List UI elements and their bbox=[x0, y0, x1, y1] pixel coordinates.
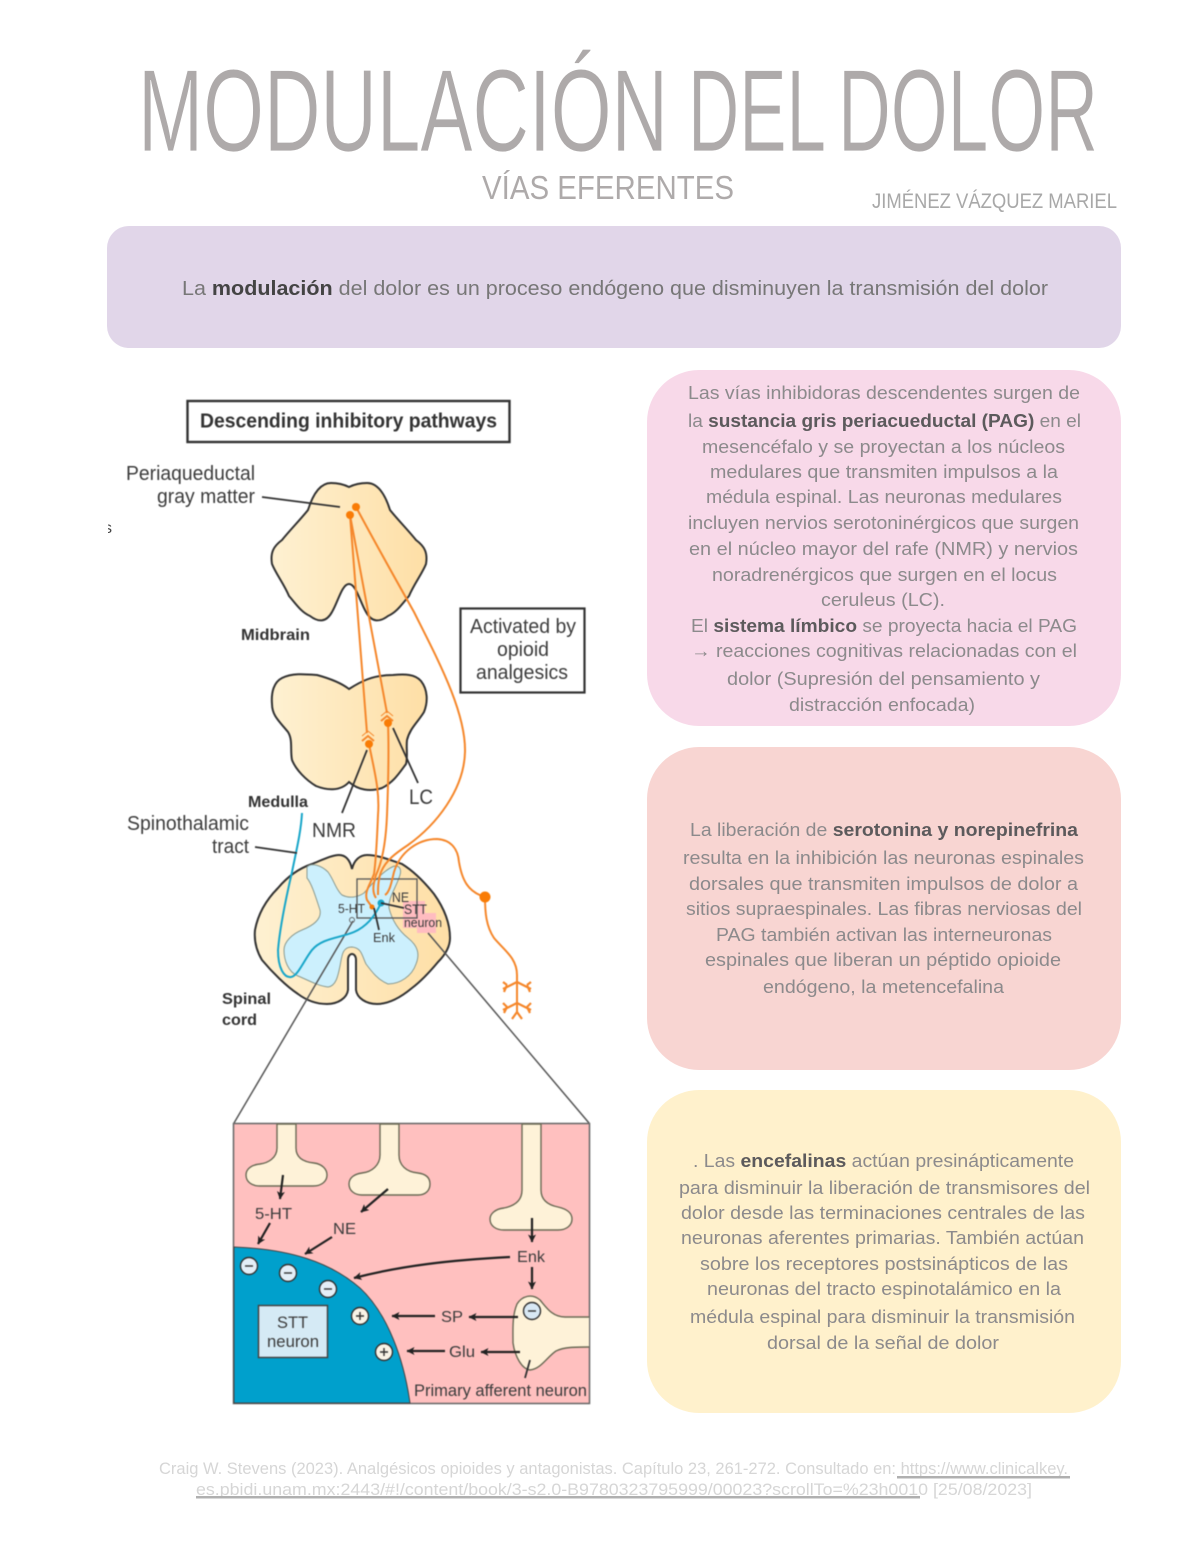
inset labels: 5-HT bbox=[255, 1206, 292, 1223]
gray matter bbox=[284, 865, 418, 987]
serotonin paragraph: PAG también activan las interneuronas bbox=[716, 924, 1052, 945]
labels: Spinothalamic bbox=[127, 813, 249, 835]
inset labels: Enk bbox=[517, 1249, 546, 1266]
reference: Craig W. Stevens (2023). Analgésicos opioides y antagonistas. Capítulo 23, 261-272. Consultado en: https://www.clinicalkey. bbox=[159, 1459, 1068, 1478]
descending neurons bbox=[346, 503, 531, 1019]
labels: neuron bbox=[404, 915, 442, 930]
inset labels: Glu bbox=[449, 1344, 475, 1361]
labels: Spinal bbox=[222, 991, 271, 1008]
enkephalins paragraph: neuronas del tracto espinotalámico en la bbox=[707, 1278, 1062, 1299]
enkephalins paragraph: médula espinal para disminuir la transmisión bbox=[690, 1306, 1075, 1327]
labels: 5-HT bbox=[338, 902, 365, 916]
inset labels: Primary afferent neuron bbox=[414, 1382, 587, 1400]
inset: synapse detail bbox=[234, 1124, 590, 1404]
serotonin paragraph: espinales que liberan un péptido opioide bbox=[705, 949, 1061, 970]
serotonin paragraph bbox=[683, 819, 1084, 997]
labels: STT bbox=[404, 902, 427, 917]
enkephalins paragraph: neuronas aferentes primarias. También actúan bbox=[681, 1227, 1084, 1248]
serotonin paragraph: resulta en la inhibición las neuronas espinales bbox=[683, 847, 1084, 868]
pathways paragraph: mesencéfalo y se proyectan a los núcleos bbox=[702, 436, 1065, 457]
subtitle: VÍAS EFERENTES bbox=[482, 169, 734, 206]
reference: es.pbidi.unam.mx:2443/#!/content/book/3-s2.0-B9780323795999/00023?scrollTo=%23h0010 [25/08/2023] bbox=[196, 1480, 1032, 1499]
serotonin paragraph: dorsales que transmiten impulsos de dolor a bbox=[689, 873, 1079, 894]
midbrain section bbox=[271, 483, 427, 620]
stray glyph: s bbox=[104, 520, 112, 537]
definition text: La modulación del dolor es un proceso endógeno que disminuyen la transmisión del dolor bbox=[182, 278, 1048, 300]
spinal cord section bbox=[255, 855, 450, 1004]
STT neuron highlight bbox=[403, 901, 436, 933]
title: DEL bbox=[688, 45, 826, 176]
pathways paragraph: Las vías inhibidoras descendentes surgen de bbox=[688, 382, 1080, 403]
arrows bbox=[258, 1175, 532, 1378]
STT neuron label: STT bbox=[277, 1314, 308, 1332]
labels: cord bbox=[222, 1012, 257, 1029]
pathways paragraph bbox=[688, 382, 1081, 715]
zoom guide lines bbox=[234, 921, 589, 1123]
enkephalins paragraph: dolor desde las terminaciones centrales de las bbox=[681, 1202, 1085, 1223]
inset labels: NE bbox=[333, 1221, 356, 1238]
pathways paragraph: El sistema límbico se proyecta hacia el PAG bbox=[691, 615, 1077, 636]
neuron somata bbox=[346, 503, 490, 910]
pathways paragraph: en el núcleo mayor del rafe (NMR) y nervios bbox=[689, 538, 1078, 559]
axon terminals bbox=[246, 1124, 589, 1370]
panel: descending pathways text bbox=[647, 370, 1121, 726]
serotonin paragraph: endógeno, la metencefalina bbox=[763, 976, 1005, 997]
panel: serotonin and norepinephrine bbox=[647, 747, 1121, 1070]
pathways paragraph: incluyen nervios serotoninérgicos que surgen bbox=[688, 512, 1079, 533]
callout: activated by opioid analgesics: opioid bbox=[497, 639, 549, 661]
pathways paragraph: noradrenérgicos que surgen en el locus bbox=[712, 564, 1057, 585]
synapse chevrons bbox=[362, 716, 393, 741]
inset marker box bbox=[357, 879, 417, 918]
labels: tract bbox=[212, 836, 249, 858]
pathways paragraph: → reacciones cognitivas relacionadas con el bbox=[691, 640, 1077, 661]
heading box bbox=[188, 401, 510, 442]
diagram: descending inhibitory pathways bbox=[126, 401, 590, 1404]
panel: definition bbox=[107, 226, 1121, 348]
callout: activated by opioid analgesics bbox=[460, 608, 584, 692]
labels: NMR bbox=[312, 820, 356, 842]
reference bbox=[159, 1459, 1070, 1499]
medulla section bbox=[272, 674, 427, 790]
inset labels: SP bbox=[441, 1309, 463, 1326]
pathways paragraph: ceruleus (LC). bbox=[821, 589, 945, 610]
afferent fibre bbox=[385, 839, 517, 1012]
labels: Periaqueductal bbox=[126, 463, 255, 485]
receptors bbox=[240, 1258, 540, 1360]
callout: activated by opioid analgesics: Activated by bbox=[470, 616, 576, 638]
leader lines bbox=[255, 497, 418, 930]
enkephalins paragraph bbox=[679, 1150, 1090, 1353]
serotonin paragraph: sitios supraespinales. Las fibras nerviosas del bbox=[686, 898, 1082, 919]
pathways paragraph: médula espinal. Las neuronas medulares bbox=[706, 486, 1062, 507]
pathways paragraph: dolor (Supresión del pensamiento y bbox=[727, 668, 1041, 689]
pathways paragraph: la sustancia gris periacueductal (PAG) en el bbox=[688, 410, 1081, 431]
labels: Midbrain bbox=[241, 627, 310, 644]
labels: LC bbox=[409, 786, 433, 809]
inset labels bbox=[255, 1206, 587, 1400]
STT neuron label: neuron bbox=[267, 1333, 319, 1351]
labels: NE bbox=[392, 889, 409, 905]
STT neuron body bbox=[234, 1247, 410, 1403]
enkephalins paragraph: sobre los receptores postsinápticos de las bbox=[700, 1253, 1068, 1274]
labels bbox=[126, 463, 442, 1029]
labels: Enk bbox=[373, 930, 395, 945]
author: JIMÉNEZ VÁZQUEZ MARIEL bbox=[872, 190, 1117, 213]
primary afferent terminal bbox=[513, 1296, 589, 1370]
callout: activated by opioid analgesics: analgesics bbox=[476, 662, 568, 684]
dendrites bbox=[503, 982, 531, 1019]
enkephalins paragraph: para disminuir la liberación de transmisores del bbox=[679, 1177, 1090, 1198]
panel: enkephalins bbox=[647, 1090, 1121, 1413]
heading box: Descending inhibitory pathways bbox=[200, 410, 497, 432]
spinothalamic tract bbox=[278, 813, 381, 977]
pathways paragraph: medulares que transmiten impulsos a la bbox=[710, 461, 1059, 482]
enkephalins paragraph: . Las encefalinas actúan presinápticamente bbox=[693, 1150, 1074, 1171]
title: MODULACIÓN bbox=[138, 45, 668, 176]
labels: gray matter bbox=[157, 486, 255, 508]
labels: Medulla bbox=[248, 794, 308, 811]
serotonin paragraph: La liberación de serotonina y norepinefrina bbox=[690, 819, 1079, 840]
STT neuron label bbox=[258, 1306, 328, 1358]
enkephalins paragraph: dorsal de la señal de dolor bbox=[767, 1332, 999, 1353]
pathways paragraph: distracción enfocada) bbox=[789, 694, 975, 715]
